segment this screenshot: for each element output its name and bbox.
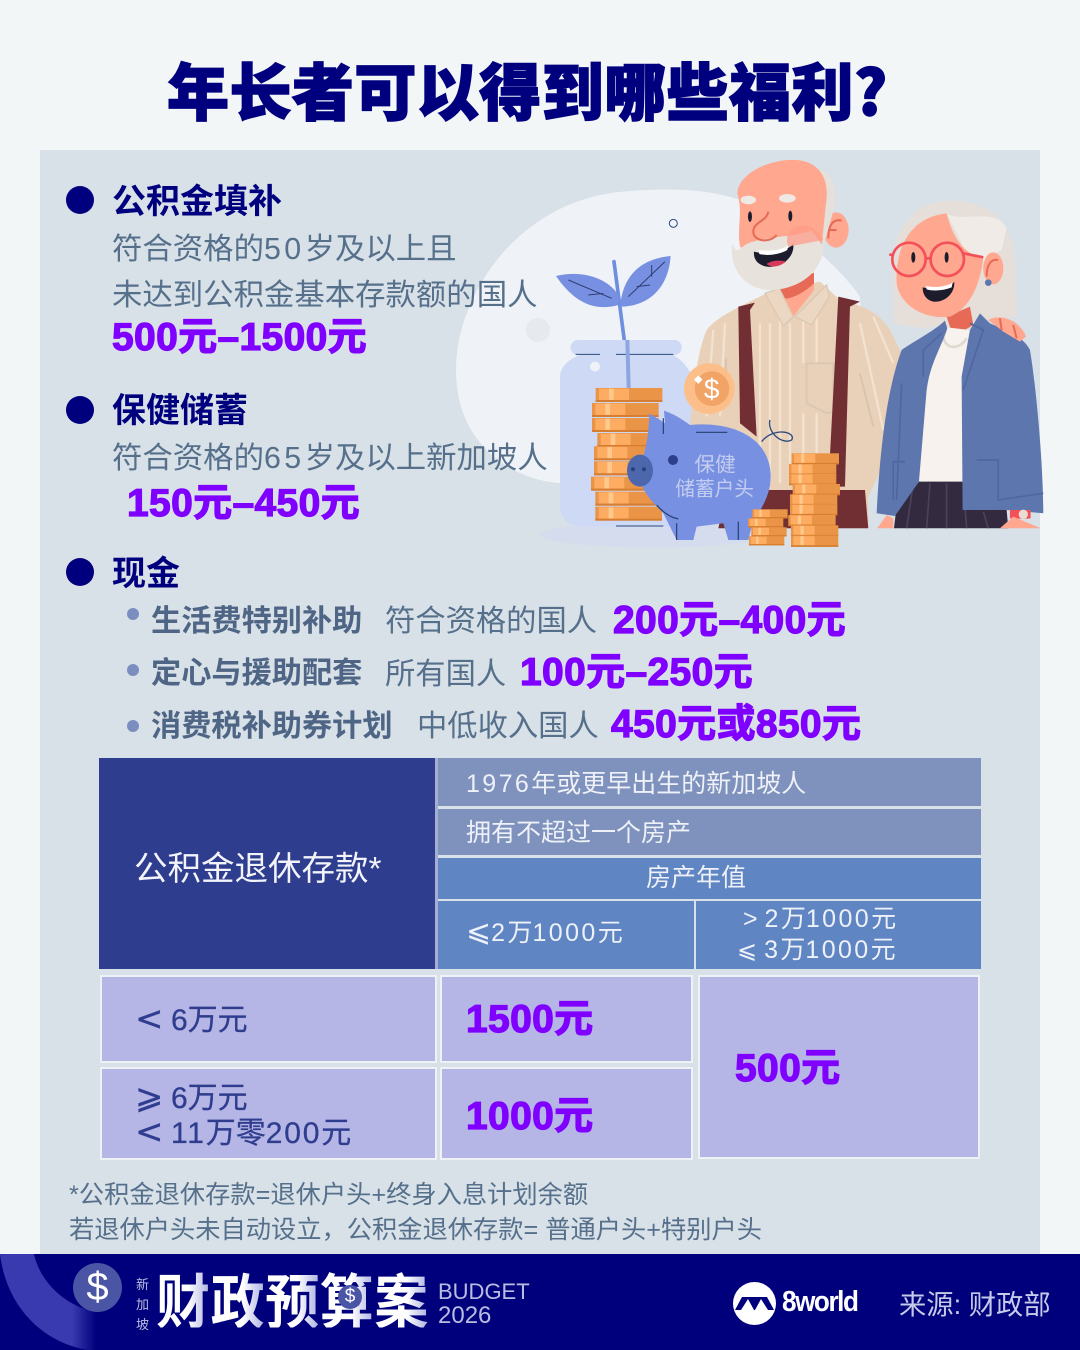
who: 符合资格的国人 <box>385 605 597 638</box>
row label: under 60k <box>100 975 437 1063</box>
main panel <box>40 150 1040 1254</box>
amount cell 1500 <box>440 975 693 1063</box>
sub bullet <box>127 608 139 620</box>
heading: 现金 <box>112 546 180 595</box>
header cell: birth year: 1976年或更早出生的新加坡人 <box>466 770 806 798</box>
row label: under 60k: 6万元 <box>171 1004 248 1037</box>
header cell: high annual value: ⩽ 3万1000元 <box>737 936 896 964</box>
header cell: high annual value <box>696 901 981 969</box>
vertical label: 坡 <box>136 1314 149 1333</box>
falling coin <box>684 363 735 414</box>
table <box>99 758 981 1160</box>
row label: 60k to 110k: 6万元 <box>171 1082 248 1115</box>
label: 消费税补助券计划 <box>151 701 393 745</box>
eligibility text: 符合资格的50岁及以上且 <box>112 232 457 266</box>
sub bullet <box>127 664 139 676</box>
header cell: annual value: 房产年值 <box>646 864 746 892</box>
label: 生活费特别补助 <box>151 596 362 640</box>
small ring <box>669 219 677 227</box>
footnote <box>69 1181 762 1244</box>
piggy bank: 保健 <box>694 448 736 478</box>
budget english: 2026 <box>438 1302 491 1329</box>
budget coin mark: $ <box>345 1286 355 1307</box>
label: 定心与援助配套 <box>151 648 362 692</box>
source: 来源: 财政部 <box>899 1289 1051 1320</box>
plant and jar <box>556 256 693 527</box>
shadow <box>540 522 767 548</box>
header cell: property: 拥有不超过一个房产 <box>466 819 691 847</box>
header cell: 公积金退休存款 <box>99 758 438 969</box>
section: 现金 <box>66 546 861 746</box>
background blob <box>456 189 873 483</box>
row label: 60k to 110k: 11万零200元 <box>171 1117 351 1150</box>
section: 保健储蓄 <box>66 383 548 525</box>
row label: 60k to 110k <box>100 1067 437 1160</box>
piggy bank: 储蓄户头 <box>675 473 754 502</box>
header cell: annual value <box>438 858 981 899</box>
row label: under 60k: < <box>135 999 164 1039</box>
sub bullet <box>127 720 139 732</box>
footer band <box>0 1254 1080 1350</box>
who: 所有国人 <box>385 658 506 691</box>
budget coin mark <box>338 1285 362 1309</box>
falling coin: $ <box>704 373 720 404</box>
header cell: high annual value: > 2万1000元 <box>743 905 896 933</box>
bullet <box>66 186 94 214</box>
eligibility text: 符合资格的65岁及以上新加坡人 <box>112 441 548 475</box>
row label: 60k to 110k: < <box>135 1112 164 1152</box>
heading: 保健储蓄 <box>112 383 248 432</box>
amount cell 1000 <box>440 1067 693 1160</box>
vertical label: 加 <box>136 1294 149 1313</box>
footnote: 若退休户头未自动设立，公积金退休存款= 普通户头+特别户头 <box>69 1216 762 1244</box>
pig string <box>762 420 792 442</box>
header cell: low annual value <box>438 901 694 969</box>
bullet <box>66 396 94 424</box>
amount: 100元–250元 <box>520 651 753 694</box>
header cell: low annual value: ⩽2万1000元 <box>466 914 623 949</box>
logo: 8world <box>733 1282 858 1325</box>
footnote: *公积金退休存款=退休户头+终身入息计划余额 <box>69 1181 588 1209</box>
who: 中低收入国人 <box>417 710 599 743</box>
coin stack middle <box>788 453 840 547</box>
leftover speck <box>526 318 550 342</box>
dollar badge: $ <box>86 1265 109 1309</box>
header cell: 公积金退休存款: 公积金退休存款* <box>134 851 382 888</box>
logo: 8world: 8world <box>782 1286 857 1318</box>
amount cell 1500: 1500元 <box>466 998 594 1041</box>
budget english: BUDGET <box>438 1279 530 1304</box>
heading: 公积金填补 <box>112 174 282 223</box>
footer arc decoration <box>0 1254 92 1350</box>
eligibility text line 2: 未达到公积金基本存款额的国人 <box>112 278 537 312</box>
amount cell 1000: 1000元 <box>466 1095 594 1138</box>
row: 生活费特别补助 <box>127 596 846 642</box>
amount: 150元–450元 <box>127 482 360 525</box>
coin stack small <box>748 509 788 545</box>
budget title <box>156 1268 429 1328</box>
row label: 60k to 110k: ⩾ <box>135 1077 164 1117</box>
row: 消费税补助券计划 <box>127 701 861 746</box>
header cell: property <box>438 809 981 855</box>
vertical label <box>136 1274 149 1333</box>
man <box>690 160 902 528</box>
bullet <box>66 558 94 586</box>
amount: 500元–1500元 <box>112 316 367 359</box>
amount: 200元–400元 <box>613 599 846 642</box>
piggy bank <box>627 411 771 540</box>
amount cell 500 <box>698 975 980 1159</box>
dollar badge <box>73 1263 122 1312</box>
budget english <box>438 1279 530 1329</box>
amount cell 500: 500元 <box>735 1047 840 1090</box>
coin stack left <box>591 388 664 521</box>
section: 公积金填补 <box>66 174 537 359</box>
header cell: birth year <box>438 758 981 806</box>
title: 年长者可以得到哪些福利? <box>167 43 888 133</box>
amount: 450元或850元 <box>611 703 861 746</box>
row: 定心与援助配套 <box>127 648 753 694</box>
budget title: 财政预算案 <box>156 1254 429 1341</box>
woman <box>877 201 1043 528</box>
vertical label: 新 <box>136 1274 149 1293</box>
